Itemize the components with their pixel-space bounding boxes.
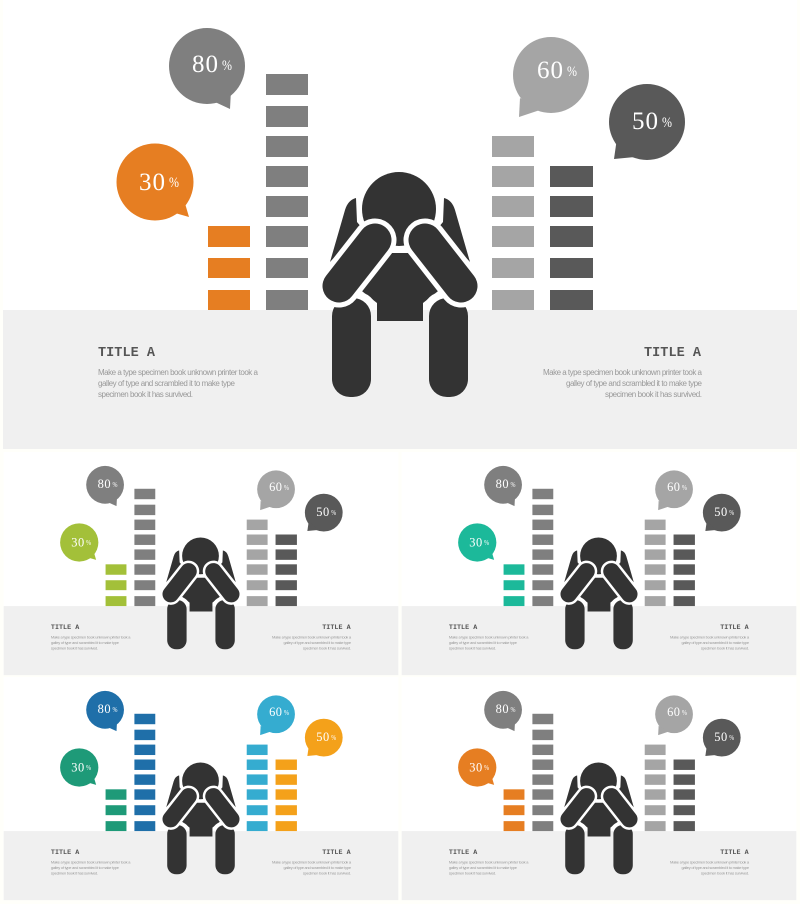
callout: 80% — [484, 466, 522, 506]
callout: 60% — [655, 470, 693, 510]
text block: right: Make a type specimen book unknown printer took a — [272, 859, 352, 864]
callout: 30%: 30 — [139, 169, 166, 196]
callout: 50%: % — [729, 733, 734, 742]
callout: 30% — [60, 523, 98, 562]
text block: right: Make a type specimen book unknown printer took a — [670, 859, 750, 864]
callout: 60%: 60 — [537, 57, 564, 84]
text block: left — [51, 849, 131, 875]
text block: left: galley of type and scrambled it to make type — [98, 379, 236, 388]
callout: 50% — [703, 719, 741, 757]
text block: left: galley of type and scrambled it to make type — [449, 640, 518, 645]
callout: 30%: % — [484, 538, 489, 547]
callout: 30% — [60, 748, 98, 787]
callout: 60% — [257, 470, 295, 510]
icon: distressed person — [562, 762, 636, 874]
callout: 80%: % — [113, 480, 118, 489]
bars: 50% column — [550, 166, 593, 310]
icon: distressed person — [562, 537, 636, 649]
text block: left: Make a type specimen book unknown printer took a — [51, 634, 131, 639]
callout: 60%: % — [284, 483, 289, 492]
text block: left: TITLE A — [449, 849, 478, 857]
text block: right: specimen book it has survived. — [701, 870, 749, 875]
text block: right: specimen book it has survived. — [605, 390, 702, 399]
callout: 50% — [305, 494, 343, 532]
text block: right: TITLE A — [720, 624, 750, 632]
text block: right: TITLE A — [322, 849, 352, 857]
callout: 50%: % — [331, 508, 336, 517]
callout: 30%: % — [484, 763, 489, 772]
text block: left: specimen book it has survived. — [449, 645, 496, 650]
text block: right — [543, 346, 703, 399]
text block: left: TITLE A — [51, 624, 80, 632]
text block: left: galley of type and scrambled it to make type — [51, 640, 120, 645]
text block: left: specimen book it has survived. — [51, 870, 98, 875]
text block: right: galley of type and scrambled it to make type — [682, 640, 750, 645]
callout: 80%: % — [511, 480, 516, 489]
callout: 30%: 30 — [71, 760, 85, 774]
panel: multicolour variant — [4, 677, 398, 900]
text block: left: specimen book it has survived. — [51, 645, 98, 650]
text block: left — [98, 346, 259, 399]
text block: right — [670, 624, 750, 650]
panel: orange variant — [402, 677, 796, 900]
callout: 80% — [484, 691, 522, 731]
callout: 60% — [257, 695, 295, 735]
callout: 50%: 50 — [632, 108, 659, 135]
text block: left — [51, 624, 131, 650]
text block: left: Make a type specimen book unknown printer took a — [51, 859, 131, 864]
text block: right: specimen book it has survived. — [701, 645, 749, 650]
text block: right: specimen book it has survived. — [303, 645, 351, 650]
callout: 80% — [86, 466, 124, 506]
text block: right: Make a type specimen book unknown printer took a — [543, 368, 703, 377]
panel: green variant — [4, 452, 398, 675]
bars: 30% column — [208, 226, 250, 310]
callout: 80%: 80 — [192, 51, 219, 78]
callout: 50%: 50 — [316, 505, 330, 519]
callout: 30% — [458, 523, 496, 562]
callout: 30%: % — [86, 538, 91, 547]
text block: right — [670, 849, 750, 875]
callout: 60%: 60 — [667, 480, 680, 494]
text block: right: galley of type and scrambled it to make type — [566, 379, 703, 388]
text block: left: TITLE A — [51, 849, 80, 857]
text block: right: Make a type specimen book unknown printer took a — [670, 634, 750, 639]
callout: 80% — [86, 691, 124, 731]
panel: teal variant — [402, 452, 796, 675]
callout: 60%: % — [682, 483, 687, 492]
text block: right: galley of type and scrambled it to make type — [284, 865, 352, 870]
callout: 80%: % — [113, 705, 118, 714]
callout: 60%: 60 — [269, 480, 282, 494]
text block: right: TITLE A — [720, 849, 750, 857]
text block: right: Make a type specimen book unknown printer took a — [272, 634, 352, 639]
callout: 60%: % — [567, 64, 577, 80]
text block: left — [449, 849, 529, 875]
text block: right: TITLE A — [644, 346, 702, 361]
callout: 60% — [655, 695, 693, 735]
callout: 30%: 30 — [469, 760, 483, 774]
callout: 50%: 50 — [714, 730, 728, 744]
callout: 30%: 30 — [71, 535, 85, 549]
callout: 50% — [305, 719, 343, 757]
text block: left: galley of type and scrambled it to make type — [51, 865, 120, 870]
callout: 80%: % — [511, 705, 516, 714]
text block: left: Make a type specimen book unknown printer took a — [449, 859, 529, 864]
text block: right: specimen book it has survived. — [303, 870, 351, 875]
text block: left: specimen book it has survived. — [449, 870, 496, 875]
icon: distressed person — [326, 172, 474, 397]
callout: 60%: % — [284, 708, 289, 717]
callout: 50%: % — [662, 115, 672, 131]
callout: 80%: % — [222, 58, 232, 74]
callout: 60%: 60 — [269, 705, 282, 719]
callout: 60%: % — [682, 708, 687, 717]
callout: 80%: 80 — [496, 702, 509, 716]
text block: left: galley of type and scrambled it to make type — [449, 865, 518, 870]
callout: 50% — [609, 84, 685, 160]
callout: 30%: % — [86, 763, 91, 772]
bars: 60% column — [492, 136, 534, 310]
text block: left — [449, 624, 529, 650]
callout: 50% — [703, 494, 741, 532]
text block: right — [272, 849, 352, 875]
callout: 30% — [458, 748, 496, 787]
callout: 80%: 80 — [98, 702, 111, 716]
text block: left: TITLE A — [449, 624, 478, 632]
callout: 50%: % — [331, 733, 336, 742]
callout: 30%: 30 — [469, 535, 483, 549]
panel: main slide — [3, 0, 797, 449]
callout: 50%: 50 — [316, 730, 330, 744]
callout: 80%: 80 — [496, 477, 509, 491]
icon: distressed person — [164, 762, 238, 874]
callout: 60% — [513, 37, 589, 117]
callout: 50%: 50 — [714, 505, 728, 519]
text block: right — [272, 624, 352, 650]
text block: left: Make a type specimen book unknown printer took a — [449, 634, 529, 639]
text block: right: TITLE A — [322, 624, 352, 632]
bars: 80% column — [266, 74, 308, 310]
callout: 50%: % — [729, 508, 734, 517]
text block: right: galley of type and scrambled it to make type — [284, 640, 352, 645]
callout: 60%: 60 — [667, 705, 680, 719]
callout: 30%: % — [169, 175, 179, 191]
callout: 80%: 80 — [98, 477, 111, 491]
text block: left: Make a type specimen book unknown printer took a — [98, 368, 259, 377]
callout: 80% — [169, 28, 245, 109]
text block: left: specimen book it has survived. — [98, 390, 193, 399]
text block: left: TITLE A — [98, 346, 156, 361]
text block: right: galley of type and scrambled it to make type — [682, 865, 750, 870]
icon: distressed person — [164, 537, 238, 649]
callout: 30% — [116, 144, 194, 220]
